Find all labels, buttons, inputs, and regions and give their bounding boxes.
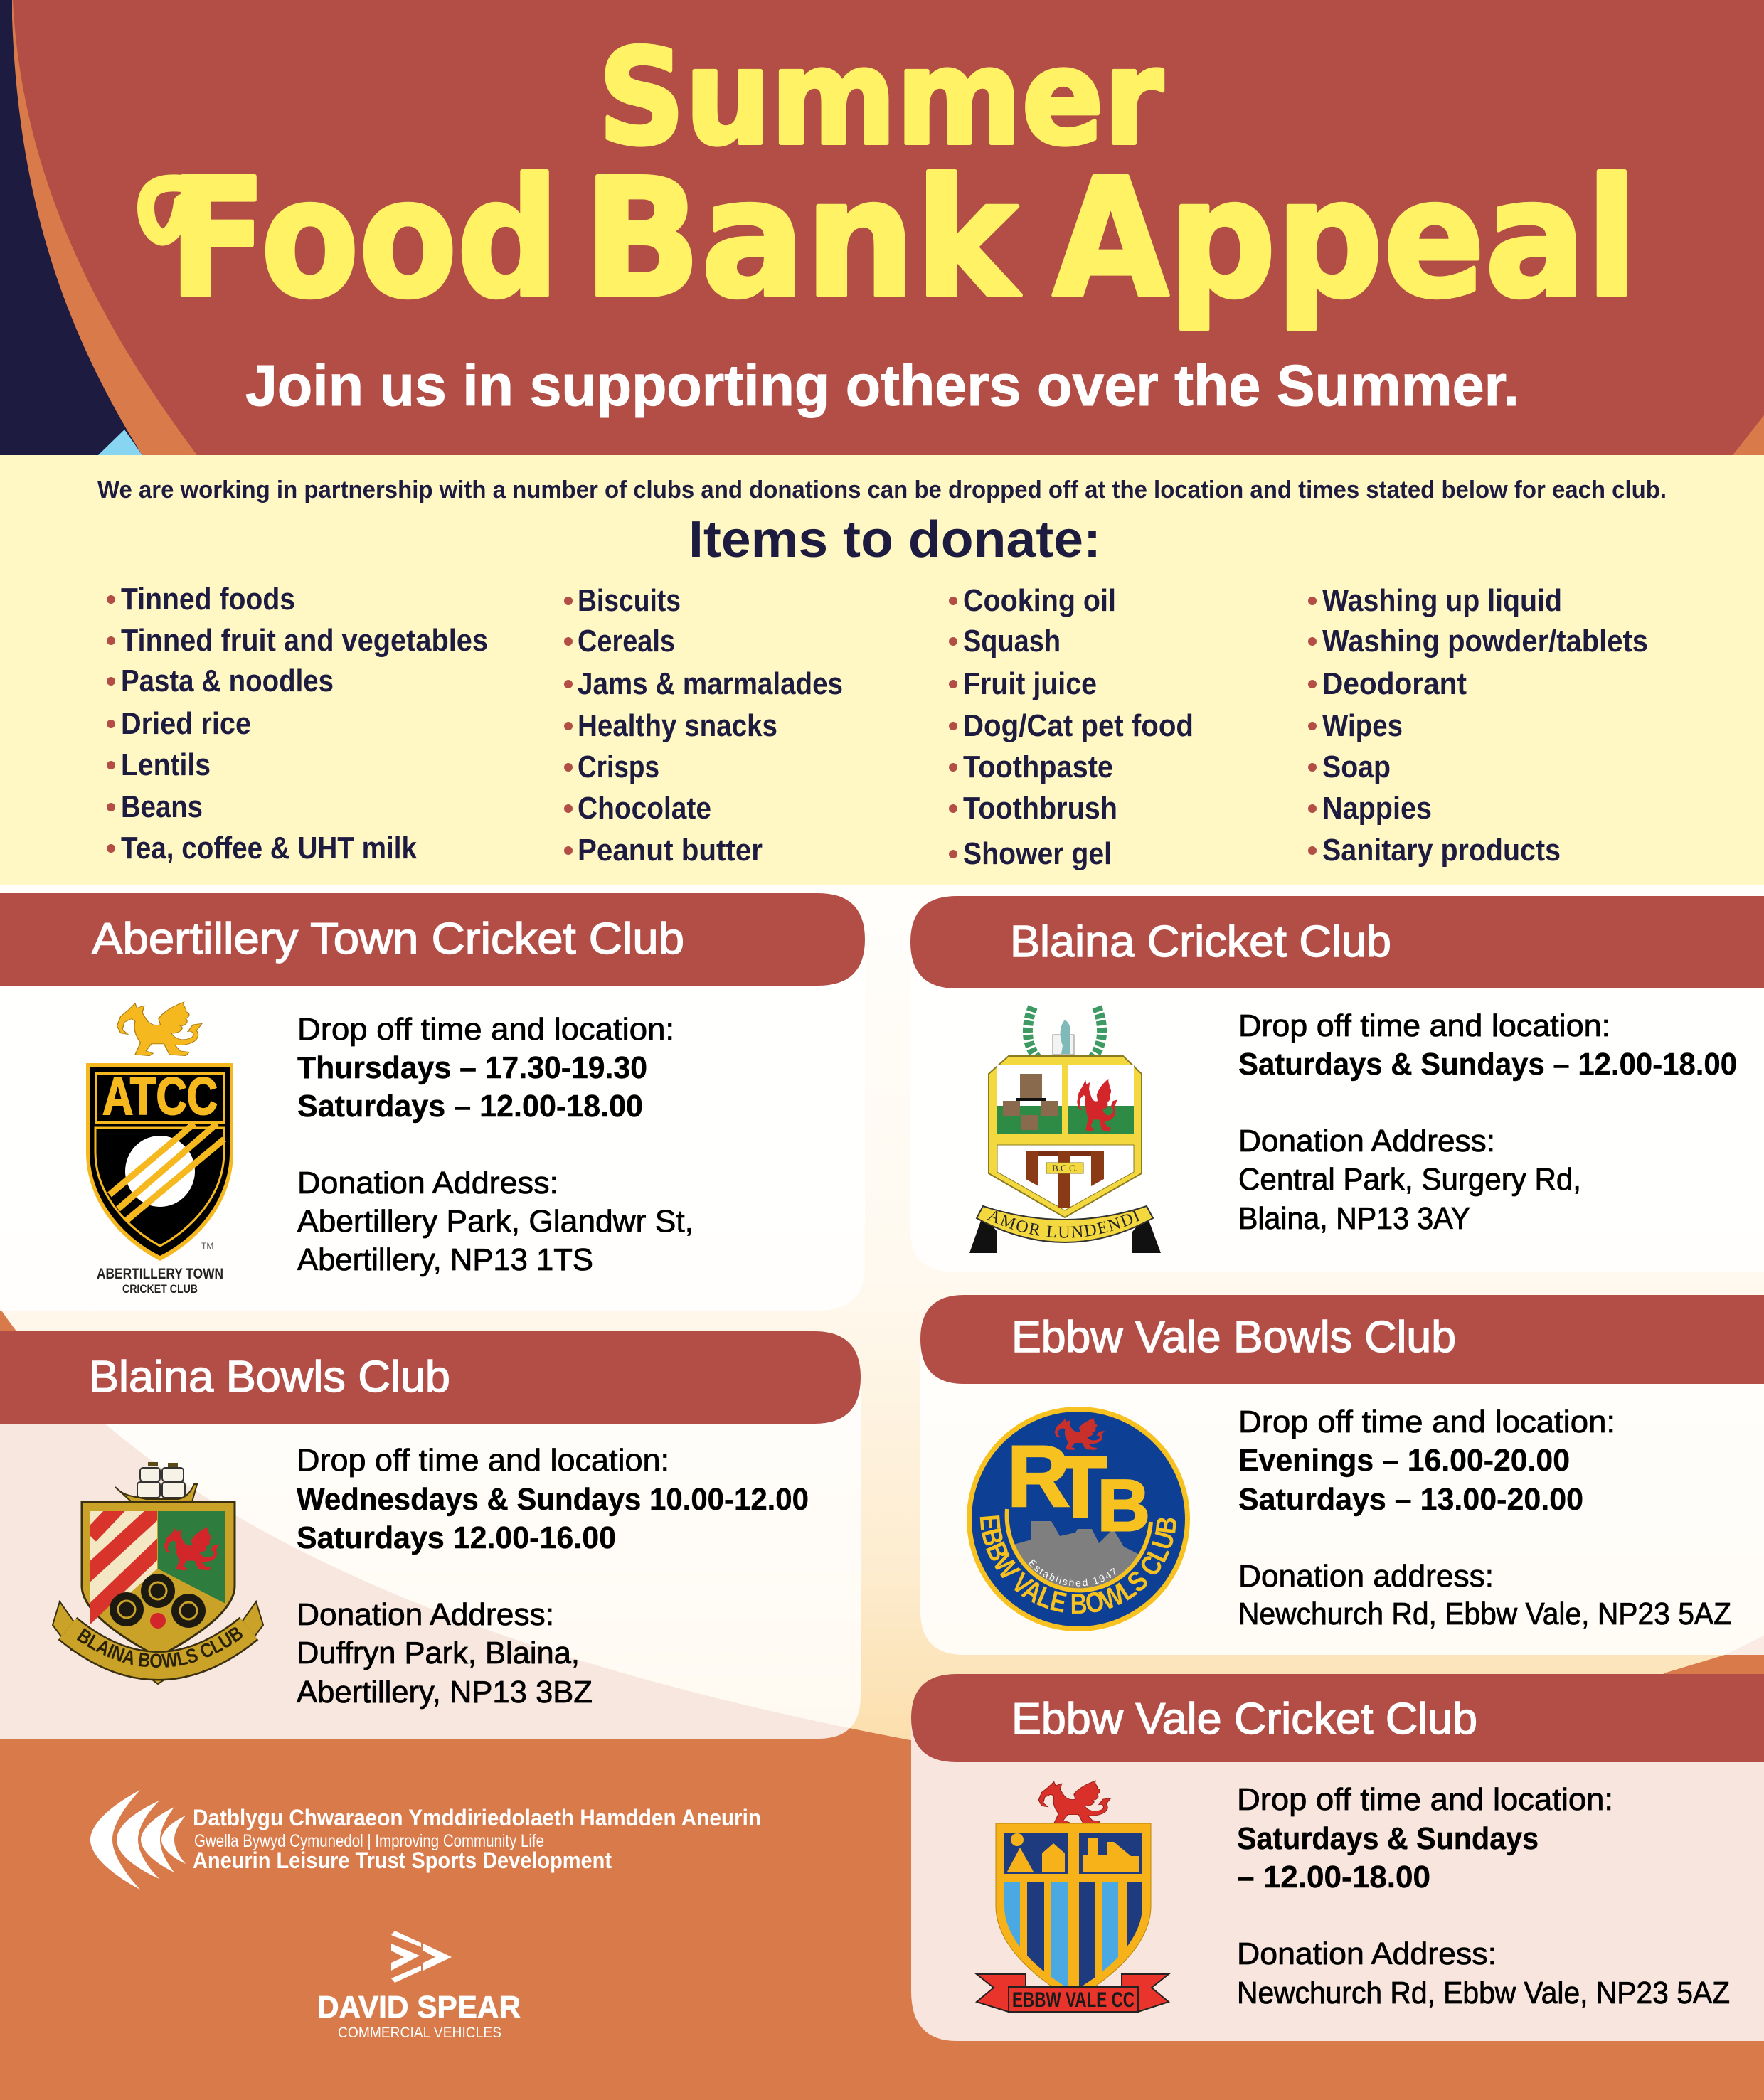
logo: RTB badge: R [1007,1428,1070,1525]
drop off details: Donation Address: [297,1166,558,1200]
company name: DAVID SPEAR [317,1990,521,2025]
icon: crescent arcs [90,1790,186,1890]
list: household items column 4: Washing up liquid [1322,583,1562,618]
title: Summer: Summer [598,21,1163,174]
list: food items column 1: Tea, coffee & UHT milk [121,831,417,865]
drop off details: Donation Address: [1237,1936,1497,1971]
list: food and toiletries column 3: Dog/Cat pet food [963,708,1194,743]
logo: RTB badge: T [1054,1439,1107,1535]
list: food and toiletries column 3: Cooking oil [963,583,1116,618]
drop off details: Saturdays – 12.00-18.00 [297,1089,643,1124]
list: food items column 1: Dried rice [121,706,251,741]
logo: Blaina Cricket shield: B.C.C. [1052,1163,1078,1173]
drop off details [297,1443,809,1710]
list: household items column 4: Nappies [1322,791,1432,826]
drop off details: Saturdays – 13.00-20.00 [1238,1482,1583,1517]
drop off details: Duffryn Park, Blaina, [297,1636,580,1670]
title: Food Bank Appeal: Appeal [1053,144,1637,334]
background orange shape [0,1308,1764,2100]
title: Food Bank Appeal: Bank [583,144,1021,334]
drop off details: Saturdays & Sundays – 12.00-18.00 [1238,1047,1737,1082]
logo: David Spear Commercial Vehicles [317,1931,521,2041]
drop off details: Blaina, NP13 3AY [1238,1201,1470,1236]
title: Food Bank Appeal [146,144,1637,334]
list: food items column 2 [564,583,843,868]
list: food items column 1: Tinned fruit and vegetables [121,623,488,658]
club header [0,893,865,986]
list: food and toiletries column 3: Shower gel [963,836,1112,871]
trust name text: Gwella Bywyd Cymunedol | Improving Community Life [194,1831,544,1851]
logo: ATCC shield: TM [201,1241,213,1251]
drop off details [1237,1782,1730,2010]
logo: Blaina Bowls shield [51,1462,265,1685]
club header [911,1674,1764,1762]
drop off details: Abertillery, NP13 1TS [297,1242,593,1277]
list: food items column 1: Pasta & noodles [121,663,334,698]
drop off details [1238,1008,1737,1236]
logo: Blaina Bowls shield: BLAINA BOWLS CLUB [77,1627,243,1668]
list: food items column 2: Cereals [578,624,675,659]
list: food items column 1: Tinned foods [121,582,295,617]
list: household items column 4: Wipes [1322,708,1403,743]
drop off details: Drop off time and location: [1238,1008,1610,1043]
club header [910,896,1764,988]
list: household items column 4: Deodorant [1322,666,1467,701]
drop off details: Abertillery, NP13 3BZ [297,1675,593,1710]
panel: Blaina Cricket Club [910,896,1764,1272]
club header [0,1331,861,1424]
list: food items column 1: Lentils [121,747,211,782]
panel: Abertillery Town Cricket Club [0,893,865,1311]
logo: Blaina Cricket shield [969,1005,1161,1253]
club name: Blaina Bowls Club [89,1353,450,1402]
list: food items column 2: Healthy snacks [578,708,777,743]
list: food items column 2: Biscuits [578,583,681,618]
club header [920,1295,1764,1384]
logo: RTB badge: Established 1947 [1029,1559,1115,1587]
drop off details: Drop off time and location: [297,1012,674,1047]
trust name text [193,1805,761,1873]
drop off details: Saturdays & Sundays [1237,1821,1539,1856]
list: food and toiletries column 3: Toothbrush [963,791,1117,826]
logo: Ebbw Vale CC shield [977,1781,1169,2012]
list: food items column 2: Chocolate [578,791,711,826]
list: household items column 4: Sanitary products [1322,833,1561,868]
list: household items column 4: Washing powder/tablets [1322,624,1648,659]
logo: ATCC shield: ABERTILLERY TOWN [97,1266,223,1282]
drop off details: Donation address: [1238,1559,1494,1594]
drop off details: Newchurch Rd, Ebbw Vale, NP23 5AZ [1238,1597,1731,1631]
list: food and toiletries column 3: Fruit juice [963,666,1097,701]
logo: RTB badge: B [1098,1465,1150,1546]
company tagline: COMMERCIAL VEHICLES [338,2025,501,2041]
logo: Blaina Cricket shield: AMOR LUNDENDI [987,1210,1141,1238]
panel: items to donate [0,455,1764,885]
trust name text: Datblygu Chwaraeon Ymddiriedolaeth Hamdden Aneurin [193,1805,761,1830]
drop off details: Newchurch Rd, Ebbw Vale, NP23 5AZ [1237,1976,1730,2010]
logo: RTB badge [967,1407,1190,1631]
logo: Aneurin Leisure Trust [90,1790,761,1890]
list: food items column 2: Crisps [578,750,659,784]
drop off details: Evenings – 16.00-20.00 [1238,1443,1570,1478]
drop off details: Saturdays 12.00-16.00 [297,1520,616,1555]
drop off details: Wednesdays & Sundays 10.00-12.00 [297,1482,809,1517]
panel: Ebbw Vale Bowls Club [920,1295,1764,1655]
logo: ATCC shield [86,1002,233,1296]
panel: Blaina Bowls Club [0,1331,861,1739]
drop off details: Central Park, Surgery Rd, [1238,1162,1581,1197]
heading: items to donate: Items to donate: [689,511,1101,568]
logo: ATCC shield: ATCC [102,1067,218,1126]
logo: Ebbw Vale CC shield: EBBW VALE CC [1012,1988,1135,2012]
list: household items column 4 [1308,583,1648,868]
panel: Ebbw Vale Cricket Club [911,1674,1764,2041]
list: food items column 2: Peanut butter [578,833,763,868]
drop off details: – 12.00-18.00 [1237,1860,1430,1894]
logo: ATCC shield: CRICKET CLUB [122,1282,198,1296]
trust name text: Aneurin Leisure Trust Sports Development [193,1848,612,1873]
list: food and toiletries column 3 [949,583,1194,871]
logo: RTB badge: EBBW VALE BOWLS CLUB [980,1515,1176,1614]
page background [0,885,1764,1774]
drop off details: Abertillery Park, Glandwr St, [297,1204,694,1239]
header banner [0,0,1764,455]
icon: chevrons [391,1931,452,1983]
title: Food Bank Appeal: Food [169,144,559,334]
drop off details: Drop off time and location: [297,1443,669,1478]
club name: Blaina Cricket Club [1010,917,1391,966]
club name: Ebbw Vale Bowls Club [1011,1313,1456,1362]
intro text: We are working in partnership with a number of clubs and donations can be dropped off at the location and times stated below for each club. [97,476,1667,503]
subtitle: Join us in supporting others over the Summer. [245,353,1519,418]
list: food and toiletries column 3: Toothpaste [963,750,1113,784]
club name: Abertillery Town Cricket Club [92,915,684,964]
drop off details [1238,1405,1731,1631]
list: household items column 4: Soap [1322,750,1391,784]
list: food items column 1: Beans [121,789,203,824]
list: food and toiletries column 3: Squash [963,624,1061,659]
list: food items column 2: Jams & marmalades [578,666,843,701]
list: food items column 1 [107,582,488,865]
drop off details [297,1012,694,1277]
drop off details: Donation Address: [297,1597,554,1632]
drop off details: Thursdays – 17.30-19.30 [297,1050,647,1085]
drop off details: Drop off time and location: [1238,1405,1615,1439]
drop off details: Drop off time and location: [1237,1782,1613,1817]
club name: Ebbw Vale Cricket Club [1011,1695,1477,1744]
drop off details: Donation Address: [1238,1124,1495,1158]
